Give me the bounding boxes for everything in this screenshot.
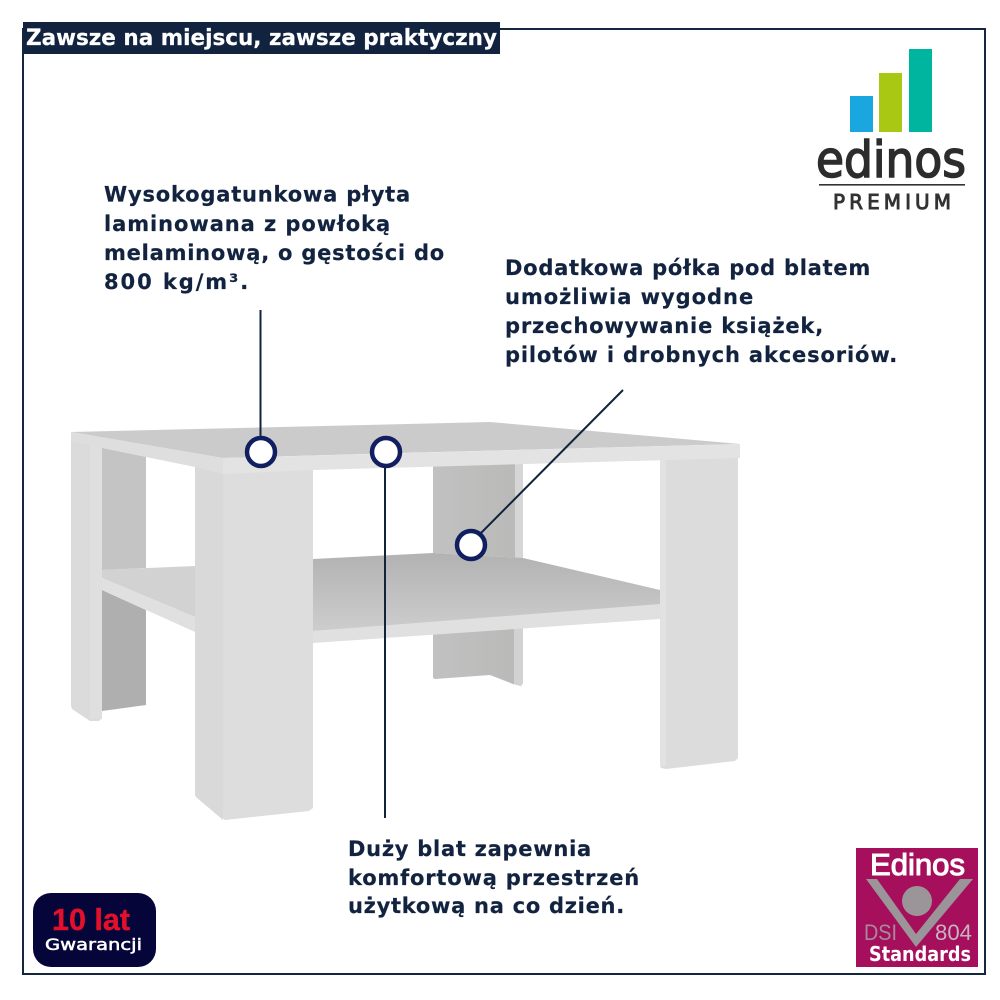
logo: Edinos Premium (816, 49, 966, 214)
callout: board material marker (247, 310, 275, 466)
text block: board material: 800 kg/m³. (104, 270, 249, 294)
icon: logo bars (850, 49, 932, 132)
text block: extra shelf: przechowywanie książek, (505, 314, 824, 338)
text block: large table top (348, 837, 640, 918)
logo wordmark: edinos (816, 131, 966, 189)
icon: grey V mark (866, 879, 973, 947)
back centre panel lower (433, 625, 523, 686)
text block: board material: laminowana z powłoką (104, 212, 391, 236)
text block: extra shelf: pilotów i drobnych akcesoriów. (505, 343, 898, 367)
right leg (660, 454, 738, 769)
lower shelf right part (313, 553, 660, 631)
text block: board material: melaminową, o gęstości do (104, 241, 445, 265)
text block: large table top: Duży blat zapewnia (348, 837, 592, 861)
text block: board material: Wysokogatunkowa płyta (104, 182, 411, 206)
text block: extra shelf: umożliwia wygodne (505, 285, 754, 309)
text block: large table top: komfortową przestrzeń (348, 866, 640, 890)
badge: Edinos Standards: Edinos (870, 847, 965, 882)
product image: coffee table (71, 422, 740, 820)
back centre panel upper (433, 460, 523, 558)
badge: Edinos Standards: Standards (869, 942, 971, 966)
table top surface (71, 422, 740, 458)
back left panel upper (102, 447, 146, 570)
badge: 10 year warranty (33, 893, 156, 967)
badge: 10 year warranty: 10 lat (52, 902, 130, 937)
table top edges (223, 444, 740, 474)
text block: extra shelf: Dodatkowa półka pod blatem (505, 256, 871, 280)
text block: large table top: użytkową na co dzień. (348, 894, 625, 918)
badge: Edinos Standards (856, 847, 978, 967)
badge: Edinos Standards: 804 (935, 920, 972, 945)
back left panel lower (102, 590, 146, 711)
front leg (195, 464, 313, 820)
title banner: Zawsze na miejscu, zawsze praktyczny (26, 26, 497, 51)
text block: board material (104, 182, 445, 294)
logo subtitle: PREMIUM (833, 190, 951, 214)
badge: 10 year warranty: Gwarancji (45, 935, 142, 954)
callout: shelf marker (457, 390, 623, 559)
back left leg (71, 436, 102, 721)
badge: Edinos Standards: DSI (864, 920, 897, 945)
lower shelf left part (102, 566, 195, 617)
text block: extra shelf (505, 256, 898, 367)
callout: table top marker (372, 438, 400, 818)
